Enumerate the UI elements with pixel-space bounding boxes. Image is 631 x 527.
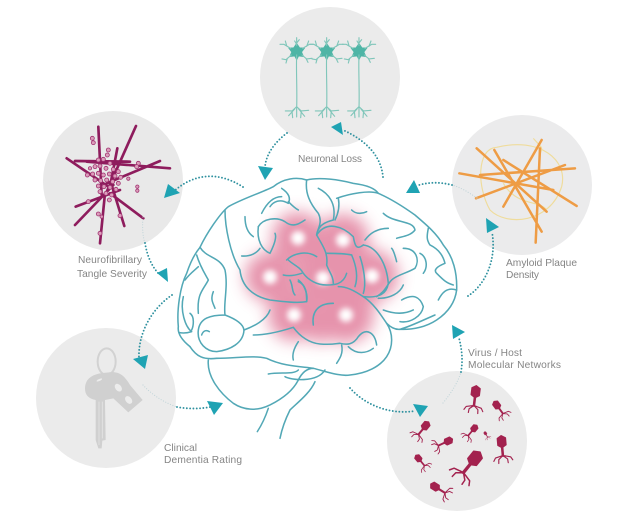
brain illustration xyxy=(178,178,457,438)
panel: neuronal loss xyxy=(260,7,400,165)
arrow: brain to amyloid xyxy=(468,218,499,296)
circle: virus background xyxy=(387,371,527,511)
arrow: brain to virus network xyxy=(350,388,428,417)
label: neurofibrillary tangle severity: Tangle Severity xyxy=(77,269,148,280)
label: amyloid plaque density: Density xyxy=(506,270,540,281)
label: clinical dementia rating: Clinical xyxy=(164,443,197,454)
arrow: brain to neuronal loss xyxy=(331,122,383,177)
arrow: clinical rating to brain xyxy=(143,385,223,415)
icon: neurofibrillary tangle xyxy=(67,126,170,243)
label: clinical dementia rating xyxy=(164,443,242,466)
circle: amyloid background xyxy=(452,115,592,255)
icon: three neurons xyxy=(280,38,376,118)
arrow: tangle to clinical rating connector xyxy=(143,217,168,282)
label: clinical dementia rating: Dementia Rating xyxy=(164,455,242,466)
pink activity regions xyxy=(245,212,398,343)
panel: amyloid plaque density xyxy=(452,115,592,281)
icon: keys xyxy=(85,348,143,448)
white activity hot spots xyxy=(263,231,379,322)
label: amyloid plaque density: Amyloid Plaque xyxy=(506,258,577,269)
arrow: neuronal loss to tangle xyxy=(258,133,287,180)
circle: clinical background xyxy=(36,328,176,468)
label: neurofibrillary tangle severity: Neurofibrillary xyxy=(78,255,143,266)
label: amyloid plaque density xyxy=(506,258,577,281)
arrow: to clinical dementia rating xyxy=(133,295,172,369)
panel: clinical dementia rating xyxy=(36,328,242,468)
icon: amyloid plaque fibres xyxy=(459,138,577,243)
circle: neuronal loss background xyxy=(260,7,400,147)
arrow: amyloid to brain xyxy=(406,180,477,198)
arrow: brain to tangle xyxy=(164,176,243,198)
label: neuronal loss: Neuronal Loss xyxy=(298,154,362,165)
label: virus / host molecular networks xyxy=(468,348,561,371)
label: virus / host molecular networks: Virus / Host xyxy=(468,348,522,359)
panel: virus / host molecular networks xyxy=(387,348,561,511)
arrow: virus network to brain xyxy=(443,325,465,403)
circle: tangle background xyxy=(43,111,183,251)
brain outline and folds xyxy=(178,178,457,438)
label: virus / host molecular networks: Molecular Networks xyxy=(468,360,561,371)
label: neurofibrillary tangle severity xyxy=(77,255,148,280)
panel: neurofibrillary tangle severity xyxy=(43,111,183,280)
icon: bacteriophages xyxy=(409,385,513,503)
